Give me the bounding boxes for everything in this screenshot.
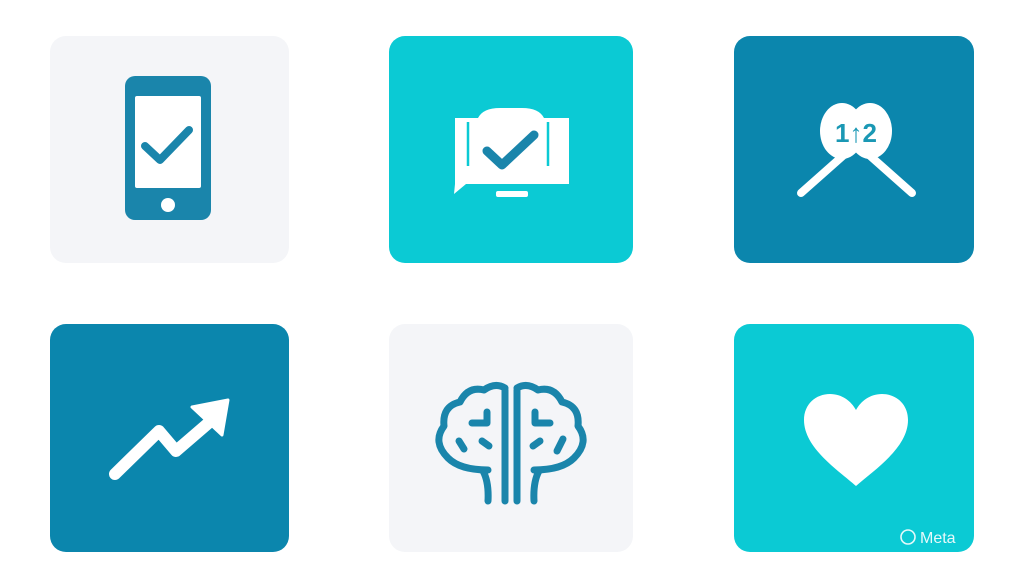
icon: trending arrow (115, 400, 228, 474)
panel: monitor (389, 36, 633, 263)
watermark: Meta: Meta (920, 530, 956, 547)
icon: monitor with check (454, 108, 569, 197)
icon: 1 up 2 badge on stand (801, 103, 912, 193)
panel: brain (389, 324, 633, 552)
panel: heart (734, 324, 974, 552)
watermark: Meta (901, 530, 956, 547)
panel: phone (50, 36, 289, 263)
icon: phone with check (125, 76, 211, 220)
icon: brain (439, 385, 583, 501)
panel: numbers (734, 36, 974, 263)
icon: heart (804, 394, 908, 486)
panel: trend (50, 324, 289, 552)
icon: 1 up 2 badge on stand: 1↑2 (835, 118, 877, 148)
